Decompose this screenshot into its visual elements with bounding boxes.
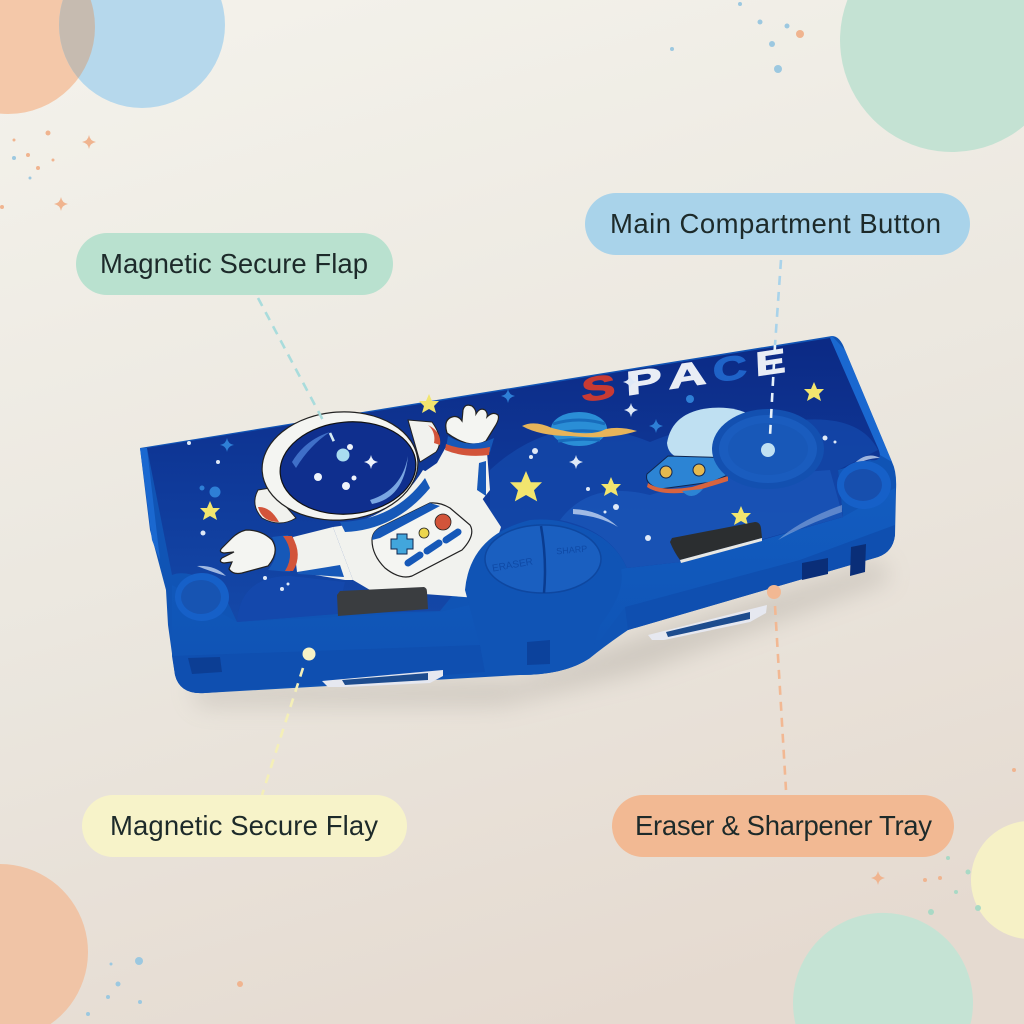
label: magnetic secure flay: Magnetic Secure Flay [110,810,378,841]
planet [522,412,637,446]
metal latch left [337,587,428,616]
dot: tray marker [767,585,781,599]
raised cuff [446,436,494,453]
left tab under case [322,670,443,687]
hills on lid [490,419,878,568]
corner button left [175,573,229,621]
gloss highlights [197,456,880,576]
large double button [465,520,622,675]
title text on lid: C [712,348,748,390]
control panel [372,503,472,577]
side slots [188,544,866,674]
label: main compartment button [585,193,970,255]
label: magnetic secure flay [82,795,407,857]
connector: magnetic secure flay [262,668,303,795]
upper front band [172,488,895,656]
main compartment button [712,409,824,489]
left arm [293,527,353,580]
connector: main compartment button [770,260,781,436]
right tab under case [648,605,767,640]
neck ring [340,478,430,532]
torso [333,470,501,598]
lid artwork [147,338,880,622]
title text on lid: P [625,361,662,403]
label: magnetic secure flap: Magnetic Secure Flap [100,248,368,279]
lower front band left [172,645,485,693]
label: eraser and sharpener tray: Eraser & Sharpener Tray [635,810,932,841]
title text on lid: E [755,342,786,384]
lower front band right [625,525,895,630]
panel cross [391,534,413,554]
label: eraser and sharpener tray [612,795,954,857]
dot: flay marker [302,648,316,660]
raised arm [424,445,490,500]
connector: magnetic secure flap [258,298,336,446]
large double button: ERASER [491,557,534,575]
title text on lid: S [581,368,616,410]
label: main compartment button: Main Compartment Button [610,208,941,239]
helmet side caps [255,488,296,523]
pencil case [140,336,896,693]
left hand [220,530,275,574]
helmet ring [258,407,422,525]
title text on lid [581,342,786,410]
side edge highlight [140,336,892,560]
dot: flap marker [336,448,350,462]
sparkles and specks [187,375,836,591]
shoulder strap [477,461,486,496]
connector: eraser and sharpener tray [775,606,786,790]
dome behind astronaut [237,576,345,622]
title text on lid: A [668,354,707,397]
visor [276,416,420,520]
large double button: SHARP [556,544,588,556]
stars on lid [200,382,824,525]
case body [140,336,896,693]
visor stars [314,444,378,490]
dot: main compartment marker [761,443,775,457]
soft shadow under case [190,560,890,705]
label: magnetic secure flap [76,233,393,295]
raised hand [446,405,498,444]
ufo [647,408,750,496]
metal latch right [670,522,762,563]
corner button right [837,461,891,509]
astronaut [220,405,501,598]
left cuff [268,535,295,572]
